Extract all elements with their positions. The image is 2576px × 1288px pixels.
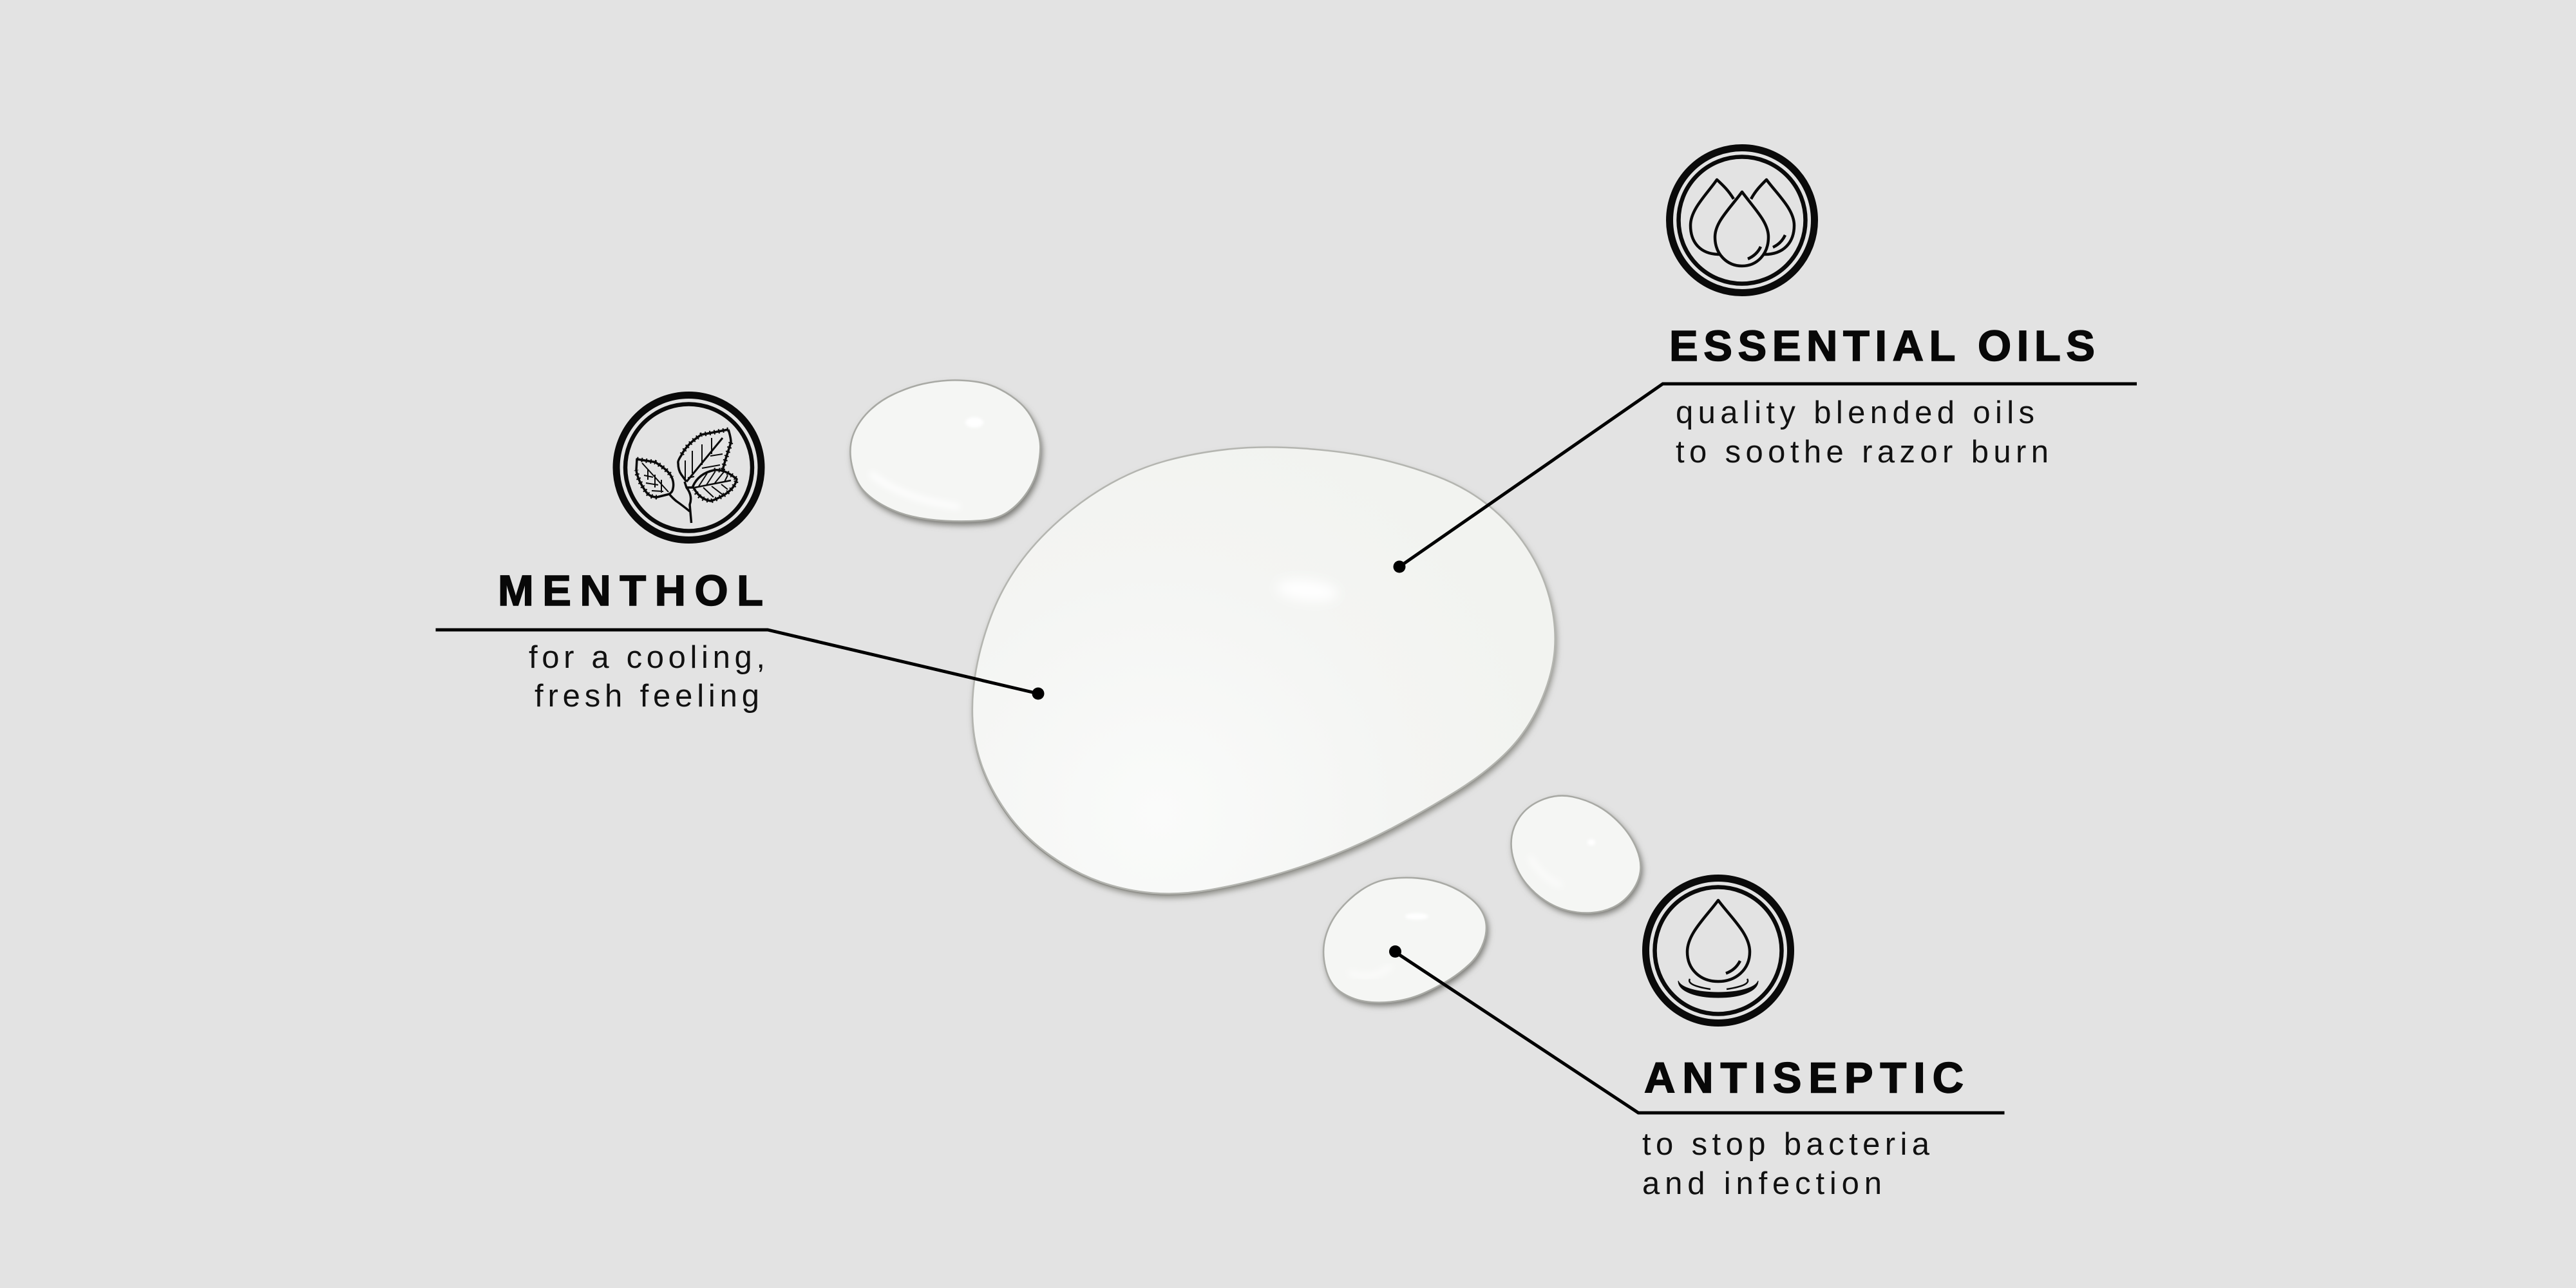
leader line [435, 630, 1038, 694]
leader dot [1389, 945, 1401, 958]
small drop: lower left [1323, 878, 1488, 1006]
small drop: top left [850, 380, 1042, 525]
description: for a cooling, [529, 640, 765, 675]
main serum drop [972, 447, 1557, 898]
icon: drop with ripples [1646, 878, 1790, 1023]
small drop: lower right [1511, 796, 1643, 916]
callout: menthol [435, 395, 1045, 714]
description: and infection [1642, 1166, 1882, 1201]
leader line [1399, 384, 2137, 567]
heading: MENTHOL [498, 567, 763, 615]
icon: mint leaves [616, 395, 761, 540]
description: quality blended oils [1676, 395, 2034, 430]
icon: three oil drops [1669, 148, 1815, 292]
heading: ANTISEPTIC [1644, 1054, 1964, 1103]
leader dot [1394, 560, 1405, 573]
description: to soothe razor burn [1676, 435, 2049, 469]
callout: essential oils [1394, 148, 2137, 573]
leader dot [1032, 688, 1045, 699]
description: to stop bacteria [1642, 1127, 1930, 1162]
callout: antiseptic [1389, 878, 2004, 1201]
heading: ESSENTIAL OILS [1669, 322, 2095, 370]
leader line [1395, 952, 2004, 1113]
description: fresh feeling [535, 679, 759, 714]
